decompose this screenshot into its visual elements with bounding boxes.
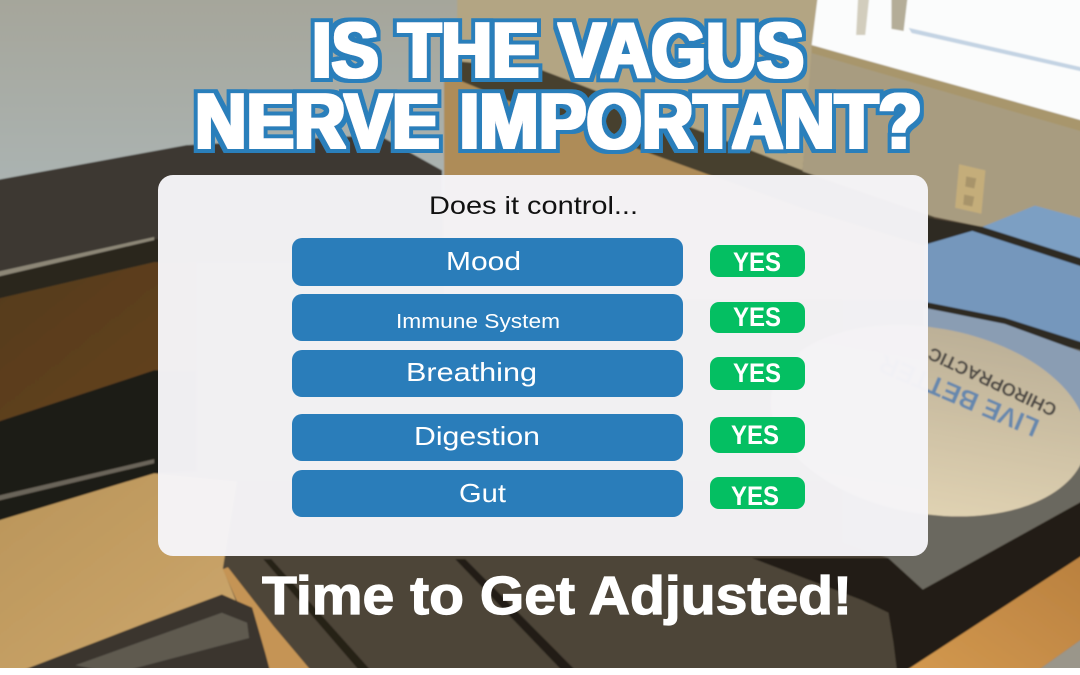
- row: digestion: YES: [731, 420, 779, 450]
- wall: tan centre section: [457, 0, 823, 171]
- row: breathing: [292, 350, 805, 397]
- row: breathing: Breathing: [406, 357, 537, 387]
- title: IS THE VAGUS: [312, 6, 804, 94]
- centre leather table: [223, 481, 923, 675]
- title: [195, 6, 922, 165]
- wall: grey left section: [0, 0, 459, 199]
- outlet on wall: [955, 164, 985, 214]
- row: immune system: Immune System: [396, 311, 560, 333]
- shelf: dark lower: [0, 370, 197, 522]
- row: mood: [292, 238, 805, 286]
- row: gut: YES: [731, 481, 779, 511]
- row: immune system: YES: [733, 302, 781, 332]
- right table: grey leather top: [843, 300, 1080, 589]
- right table: wood rail: [899, 550, 1080, 675]
- sill edge: [812, 45, 1080, 134]
- call to action: Time to Get Adjusted!: [262, 566, 852, 626]
- floor lower right: [1020, 633, 1080, 675]
- panel: does it control: [158, 175, 928, 556]
- bench: wood front: [0, 262, 197, 423]
- title: NERVE IMPORTANT?: [195, 77, 922, 165]
- panel heading: Does it control...: [429, 192, 638, 220]
- row: gut: [292, 470, 805, 517]
- bench: dark strip: [0, 239, 459, 300]
- cream logo disc: [756, 302, 1080, 540]
- table frame: wood: [223, 567, 322, 675]
- background photo: chiropractic room: CHIROPRACTIC: [925, 343, 1060, 420]
- row: immune system: [292, 294, 805, 341]
- window frame detail: [856, 0, 869, 35]
- window: white sill and glass: [812, 0, 1080, 126]
- dark gap between pads: [924, 209, 1080, 352]
- wall: tan right section: [803, 47, 1080, 227]
- row: gut: Gut: [459, 478, 507, 508]
- blue pad: front: [924, 231, 1080, 345]
- floor behind the bench: [444, 72, 934, 300]
- cushion: dark roll lower left: [15, 595, 273, 675]
- disc lettering: LIVE BETTER: [874, 349, 1043, 443]
- blue pad: lower strip: [924, 308, 1080, 431]
- bench: dark leather top: [0, 135, 442, 276]
- row: mood: YES: [733, 247, 781, 277]
- bench highlight: [0, 237, 154, 277]
- white bottom strip: [0, 668, 1080, 675]
- baseboard: dark diagonal: [457, 61, 934, 249]
- row: breathing: YES: [733, 358, 781, 388]
- pad separator lines: [263, 559, 382, 675]
- row: mood: Mood: [446, 246, 521, 276]
- right table: dark side: [752, 497, 1080, 675]
- blue pad: rear: [982, 206, 1080, 261]
- floor lower left: [0, 473, 269, 675]
- row: digestion: [292, 414, 805, 461]
- row: digestion: Digestion: [414, 421, 540, 451]
- panel background: [158, 175, 928, 556]
